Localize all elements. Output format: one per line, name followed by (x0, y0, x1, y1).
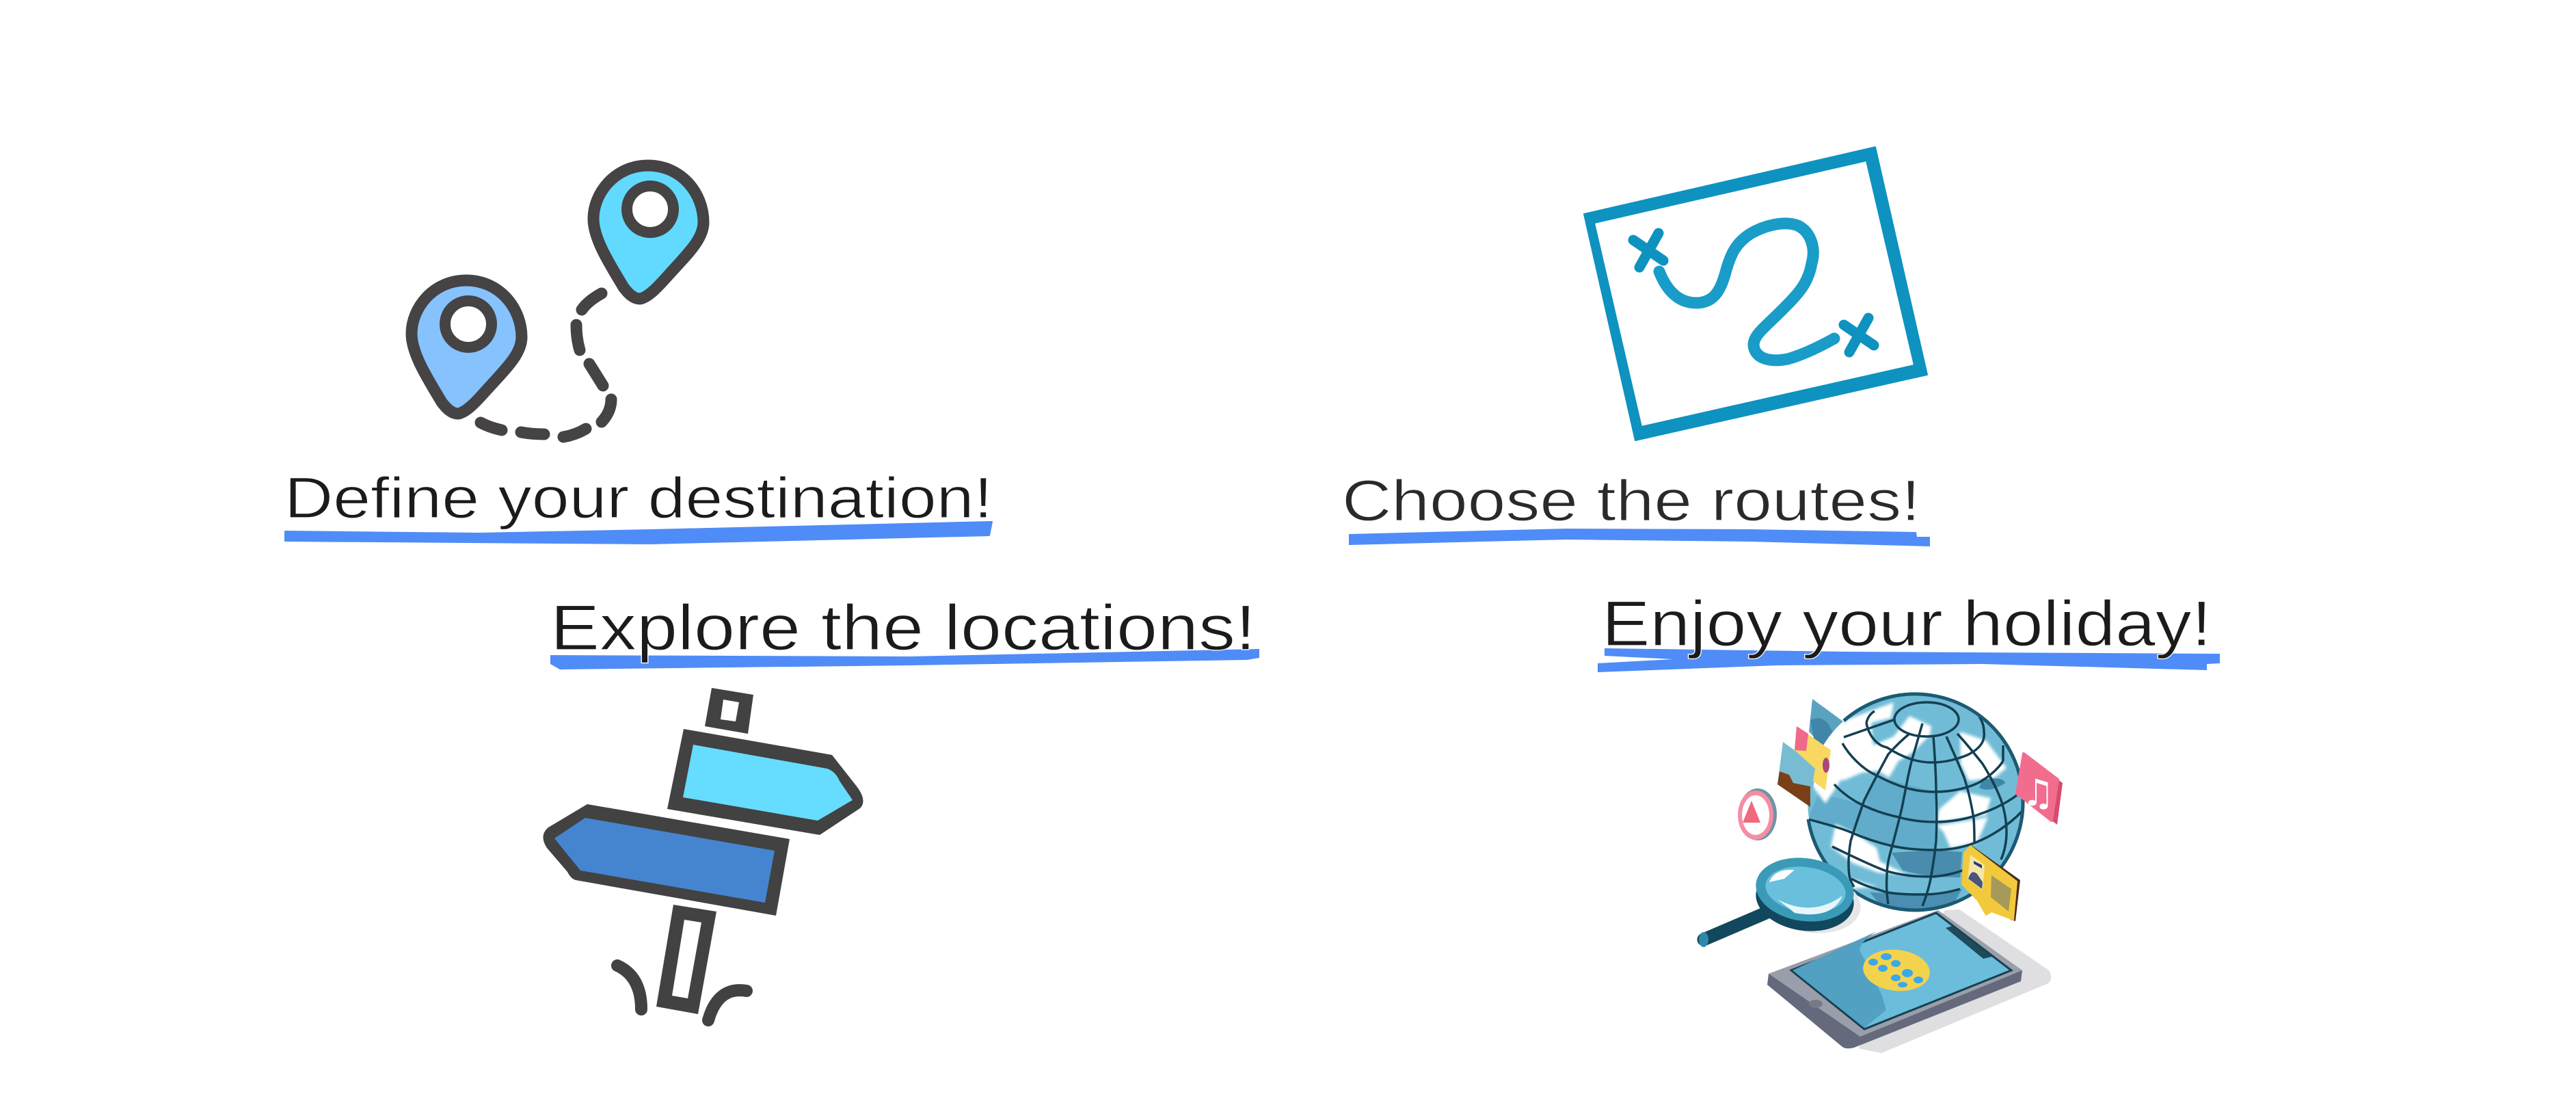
post top (705, 688, 753, 734)
card: music note (2017, 754, 2063, 825)
card: yellow speech bubble (1962, 845, 2020, 921)
tablet screen (1791, 913, 2011, 1029)
home button (1809, 1000, 1823, 1008)
sign: right arrow (667, 729, 863, 835)
tablet notch (1946, 926, 1992, 959)
landmasses (1798, 702, 2007, 889)
infographic canvas (284, 146, 2220, 1053)
panel: choose the routes (1342, 147, 1930, 546)
panel: define your destination (284, 165, 993, 544)
globe (1798, 693, 2024, 913)
dashed path (481, 293, 611, 437)
underline (285, 522, 992, 544)
screen globe badge (1861, 946, 1932, 994)
post bottom (656, 905, 716, 1014)
badge: play button (1738, 788, 1777, 840)
tablet (1767, 910, 2022, 1048)
underline (1349, 529, 1930, 546)
card: yellow and pink (1795, 726, 1831, 790)
phone shadow (1858, 909, 2051, 1053)
card: photo front (1777, 742, 1816, 807)
underline (550, 649, 1259, 669)
card: photo back (1809, 699, 1846, 764)
illustration: globe and devices (1699, 693, 2063, 1053)
underline (1598, 648, 2220, 672)
magnifier (1699, 851, 1864, 947)
panel: enjoy your holiday (1598, 587, 2220, 1053)
pin: origin (412, 280, 522, 414)
heading: Define your destination! (284, 466, 993, 530)
globe grid (1808, 702, 2022, 906)
map frame (1584, 147, 1927, 440)
heading: Explore the locations! (550, 592, 1256, 663)
ocean cells (1809, 794, 1891, 844)
panel: explore the locations (543, 592, 1259, 1020)
tablet body (1767, 912, 2022, 1048)
heading: Enjoy your holiday! (1602, 587, 2212, 659)
icon: two location pins with dashed path (412, 165, 703, 437)
heading: Choose the routes! (1342, 468, 1920, 533)
icon: signpost (543, 688, 863, 1020)
globe outline (1808, 694, 2023, 910)
pin: destination (593, 165, 703, 299)
sign: left arrow (543, 804, 790, 916)
route line (1659, 224, 1834, 360)
icon: route map (1584, 147, 1927, 440)
card: music note: ♫ (2022, 771, 2054, 814)
grass (617, 966, 747, 1020)
start and end markers (1633, 233, 1874, 352)
